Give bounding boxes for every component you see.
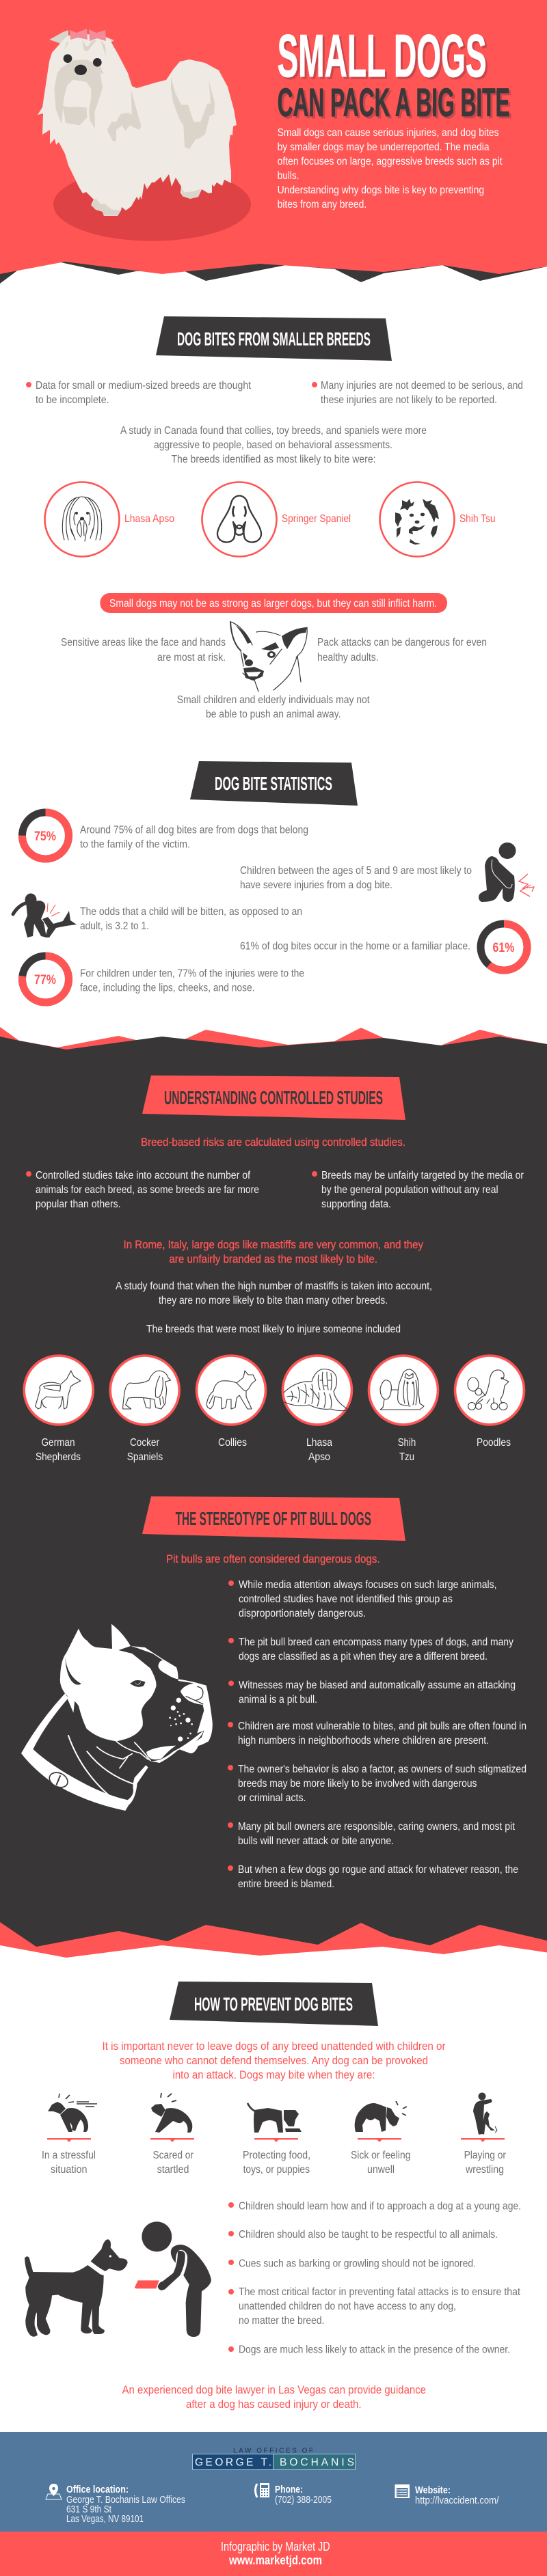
contact: office location: 631 S 9th St (66, 2504, 111, 2515)
bullet: number of animals: animals for each breed, as some breeds are far more (36, 1184, 259, 1196)
text: Canada study (120, 425, 427, 465)
panel: understanding controlled studies (24, 1075, 524, 1463)
stat text: home: 61% of dog bites occur in the home or a familiar place. (240, 940, 470, 953)
contact: phone: (702) 388-2005 (275, 2495, 332, 2506)
intro text (103, 2040, 446, 2081)
heading banner (142, 1496, 405, 1541)
breed: Cocker Spaniels: Spaniels (127, 1451, 163, 1463)
donut chart: 77%: 77% (34, 973, 56, 987)
bullet: incomplete data (26, 380, 252, 406)
illustration: person and dog (25, 2221, 211, 2337)
bullet: many types: The pit bull breed can encompass many types of dogs, and many (239, 1636, 513, 1648)
heading banner (142, 1075, 405, 1120)
trigger: sick or unwell (351, 2101, 410, 2176)
bullet: witnesses (228, 1680, 516, 1705)
panel: stereotype of pit bull dogs (21, 1496, 526, 1890)
contact: office location: Office location: (66, 2484, 129, 2495)
breed: Shih Tsu: Shih Tsu (459, 513, 495, 525)
breed: German Shepherds (24, 1356, 93, 1463)
breed: Poodles: Poodles (477, 1437, 511, 1449)
heading banner: HOW TO PREVENT DOG BITES (194, 1994, 353, 2014)
contact: website: Website: (415, 2485, 451, 2496)
trigger: playing or wrestling: wrestling (465, 2164, 504, 2176)
heading banner: THE STEREOTYPE OF PIT BULL DOGS (176, 1508, 371, 1529)
bullet: responsible owners: Many pit bull owners are responsible, caring owners, and most pit (238, 1821, 516, 1833)
panel: credit bar: www.marketjd.com (228, 2553, 322, 2567)
breed: Lhasa Apso (283, 1356, 351, 1463)
panel: how to prevent dog bites (25, 1982, 521, 2411)
hero intro text: Small dogs can cause serious injuries, and dog bites (278, 127, 499, 139)
bullet: responsible owners: bulls will never attack or bite anyone. (238, 1835, 394, 1847)
stat text: ages 5 to 9: Children between the ages of 5 and 9 are most likely to (240, 865, 472, 877)
bullet: unreported injuries (312, 380, 523, 406)
highlight: Rome, Italy (124, 1238, 423, 1265)
text: mastiff study: they are no more likely to bite than many other breeds. (159, 1295, 388, 1306)
text: Canada study: A study in Canada found that collies, toy breeds, and spaniels were more (120, 425, 427, 437)
breed: Springer Spaniel: Springer Spaniel (282, 513, 351, 525)
bullet: unfair targeting: Breeds may be unfairly targeted by the media or (321, 1170, 524, 1181)
stat text: face injuries: For children under ten, 77% of the injuries were to the (80, 968, 304, 980)
breed: German Shepherds: German (41, 1437, 75, 1449)
stat text: face injuries: face, including the lips, cheeks, and nose. (80, 983, 254, 994)
bullet: unfair targeting: supporting data. (321, 1198, 391, 1210)
bullet: critical factor: no matter the breed. (239, 2315, 324, 2327)
hero intro text: often focuses on large, aggressive breeds such as pit (278, 156, 503, 167)
text: sensitive areas: Sensitive areas like the face and hands (61, 637, 226, 648)
stat text: ages 5 to 9: have severe injuries from a dog bite. (240, 879, 392, 891)
icon: dog biting person (13, 894, 77, 937)
closing call to action (122, 2383, 426, 2411)
heading banner (190, 761, 358, 806)
hero title (278, 22, 510, 125)
text: Canada study: aggressive to people, based on behavioral assessments. (154, 439, 392, 451)
text: small children: be able to push an animal away. (206, 709, 341, 720)
panel: dog bite statistics (13, 761, 534, 1002)
stat text: odds: The odds that a child will be bitten, as opposed to an (80, 906, 302, 918)
panel: dog bites from smaller breeds (26, 316, 523, 720)
logo: George T. Bochanis: GEORGE T. (195, 2457, 271, 2468)
bullet: presence of owner: Dogs are much less likely to attack in the presence of the owner. (239, 2344, 510, 2356)
breed: German Shepherds: Shepherds (36, 1451, 81, 1463)
callout: inflict harm (100, 593, 447, 613)
breed: Lhasa Apso: Apso (308, 1451, 330, 1463)
highlight: Rome, Italy: In Rome, Italy, large dogs like mastiffs are very common, and they (124, 1238, 423, 1251)
bullet: owner behavior (228, 1764, 526, 1804)
donut chart: 77% (22, 956, 68, 1002)
trigger: playing or wrestling: Playing or (464, 2150, 506, 2161)
closing call to action: after a dog has caused injury or death. (186, 2398, 362, 2411)
contact: website (395, 2484, 499, 2506)
panel: credit bar (0, 2532, 547, 2576)
bullet: media attention: controlled studies have not identified this group as (239, 1593, 453, 1605)
text: small children (177, 694, 370, 720)
logo: George T. Bochanis: LAW OFFICES OF (233, 2448, 313, 2454)
intro text: It is important never to leave dogs of any breed unattended with children or (103, 2040, 446, 2053)
text: small children: Small children and elderly individuals may not (177, 694, 370, 706)
stat text: family dogs: Around 75% of all dog bites are from dogs that belong (80, 824, 308, 836)
contact: phone: Phone: (275, 2484, 303, 2495)
stat text: ages 5 to 9 (240, 865, 472, 891)
bullet: learn to approach: Children should learn how and if to approach a dog at a young age. (239, 2200, 521, 2212)
hero intro text: by smaller dogs may be underreported. The media (278, 141, 490, 153)
panel: dark section background (0, 1027, 547, 1958)
illustration: pit bull head (21, 1624, 213, 1811)
icon: kneeling hurt person (479, 842, 534, 902)
bullet: entire breed blamed: But when a few dogs go rogue and attack for whatever reason, the (238, 1864, 518, 1876)
donut chart: 75% (22, 812, 68, 859)
hero intro text: Understanding why dogs bite is key to preventing (278, 184, 484, 196)
bullet: many types: dogs are classified as a pit when they are a different breed. (239, 1651, 488, 1662)
text: pack attacks: Pack attacks can be dangerous for even (317, 637, 487, 648)
bullet: critical factor: The most critical factor in preventing fatal attacks is to ensure that (239, 2286, 521, 2298)
hero intro text: bites from any breed. (278, 199, 366, 210)
breed: Collies: Collies (218, 1437, 247, 1449)
contact: phone (256, 2483, 332, 2506)
bullet: unfair targeting (312, 1170, 524, 1210)
breed: Lhasa Apso (45, 482, 174, 556)
panel: hero (0, 0, 547, 284)
donut chart: 61% (481, 924, 527, 970)
trigger: protecting food (243, 2103, 310, 2176)
bullet: media attention: While media attention always focuses on such large animals, (239, 1579, 496, 1591)
stat text: odds (80, 906, 302, 932)
bullet: unreported injuries: Many injuries are not deemed to be serious, and (321, 380, 523, 392)
breed: Cocker Spaniels: Cocker (130, 1437, 159, 1449)
text: sensitive areas (61, 637, 226, 663)
breed: Shih Tzu: Shih (398, 1437, 416, 1449)
trigger: protecting food: Protecting food, (243, 2150, 310, 2161)
logo: George T. Bochanis (193, 2448, 356, 2469)
heading banner (156, 316, 392, 361)
panel: credit bar: Infographic by Market JD (221, 2540, 330, 2553)
logo: George T. Bochanis: BOCHANIS (280, 2457, 354, 2468)
bullet: incomplete data: Data for small or medium-sized breeds are thought (36, 380, 252, 392)
breed: Shih Tsu (380, 482, 495, 556)
bullet: children vulnerable: high numbers in neighborhoods where children are present. (238, 1735, 489, 1746)
contact: office location (46, 2484, 185, 2525)
donut chart: 75%: 75% (34, 830, 56, 844)
breed: Lhasa Apso: Lhasa (306, 1437, 332, 1449)
heading banner: UNDERSTANDING CONTROLLED STUDIES (164, 1087, 383, 1108)
subheading: breed-based risks: Breed-based risks are calculated using controlled studies. (141, 1136, 405, 1149)
icon: snarling chihuahua (230, 622, 307, 691)
contact: website: http://lvaccident.com/ (415, 2495, 499, 2506)
hero illustration: white dog (38, 29, 251, 241)
bullet: witnesses: animal is a pit bull. (239, 1694, 317, 1705)
callout: inflict harm: Small dogs may not be as strong as larger dogs, but they can still inflict harm. (109, 598, 437, 609)
hero intro text (278, 127, 503, 210)
text: breeds intro: The breeds that were most likely to injure someone included (146, 1324, 401, 1335)
breed: Shih Tzu: Tzu (399, 1451, 414, 1463)
text: mastiff study (116, 1280, 432, 1306)
heading banner: DOG BITES FROM SMALLER BREEDS (177, 328, 371, 350)
bullet: owner behavior: or criminal acts. (238, 1792, 306, 1804)
trigger: playing or wrestling (461, 2092, 506, 2176)
breed: Cocker Spaniels (110, 1356, 179, 1463)
text: pack attacks: healthy adults. (317, 652, 379, 663)
bullet: entire breed blamed (228, 1864, 518, 1890)
donut chart: 61%: 61% (492, 941, 515, 955)
bullet: respectful: Children should also be taught to be respectful to all animals. (239, 2229, 498, 2241)
bullet: critical factor (228, 2286, 521, 2327)
trigger: stressful situation: situation (51, 2164, 88, 2176)
trigger: scared or startled (150, 2093, 194, 2176)
stat text: family dogs: to the family of the victim. (80, 839, 190, 850)
panel: contact footer (0, 2432, 547, 2532)
bullet: critical factor: unattended children do not have access to any dog, (239, 2301, 456, 2312)
breed: Springer Spaniel (202, 482, 351, 556)
bullet: unreported injuries: these injuries are not likely to be reported. (321, 394, 497, 406)
trigger: sick or unwell: unwell (367, 2164, 395, 2176)
trigger: scared or startled: Scared or (153, 2150, 194, 2161)
bullet: cues: Cues such as barking or growling should not be ignored. (239, 2258, 476, 2270)
bullet: owner behavior: breeds may be more likely to be involved with dangerous (238, 1778, 477, 1790)
trigger: protecting food: toys, or puppies (243, 2164, 310, 2176)
trigger: stressful situation: In a stressful (42, 2150, 96, 2161)
bullet: witnesses: Witnesses may be biased and automatically assume an attacking (239, 1680, 516, 1691)
subheading: pit bulls: Pit bulls are often considered dangerous dogs. (166, 1552, 380, 1565)
bullet: many types (228, 1636, 513, 1662)
hero intro text: bulls. (278, 170, 299, 182)
trigger: stressful situation (42, 2094, 97, 2176)
text: mastiff study: A study found that when the high number of mastiffs is taken into account, (116, 1280, 432, 1292)
intro text: into an attack. Dogs may bite when they are: (172, 2068, 375, 2081)
stat text: odds: adult, is 3.2 to 1. (80, 920, 149, 932)
stat text: face injuries (80, 968, 304, 994)
trigger: sick or unwell: Sick or feeling (351, 2150, 410, 2161)
stat text: family dogs (80, 824, 308, 850)
text: sensitive areas: are most at risk. (157, 652, 226, 663)
breed: Poodles (455, 1356, 524, 1449)
bullet: incomplete data: to be incomplete. (36, 394, 109, 406)
bullet: entire breed blamed: entire breed is blamed. (238, 1878, 334, 1890)
breed: Collies (197, 1356, 265, 1449)
bullet: children vulnerable (228, 1721, 526, 1746)
bullet: media attention (228, 1579, 496, 1619)
text: Canada study: The breeds identified as most likely to bite were: (171, 454, 376, 465)
intro text: someone who cannot defend themselves. Any dog can be provoked (120, 2054, 428, 2067)
breed: Lhasa Apso: Lhasa Apso (124, 513, 174, 525)
bullet: unfair targeting: by the general population without any real (321, 1184, 498, 1196)
text: pack attacks (317, 637, 487, 663)
bullet: number of animals (26, 1170, 259, 1210)
heading banner (170, 1982, 378, 2026)
contact: office location: George T. Bochanis Law Offices (66, 2495, 185, 2506)
heading banner: DOG BITE STATISTICS (215, 773, 332, 794)
bullet: number of animals: popular than others. (36, 1198, 120, 1210)
breed: Shih Tzu (369, 1356, 438, 1463)
bullet: media attention: disproportionately dangerous. (239, 1608, 366, 1619)
bullet: number of animals: Controlled studies take into account the number of (36, 1170, 251, 1181)
contact: office location: Las Vegas, NV 89101 (66, 2514, 144, 2525)
trigger: scared or startled: startled (157, 2164, 189, 2176)
highlight: Rome, Italy: are unfairly branded as the most likely to bite. (169, 1252, 377, 1265)
closing call to action: An experienced dog bite lawyer in Las Vegas can provide guidance (122, 2383, 426, 2396)
bullet: responsible owners (228, 1821, 516, 1847)
